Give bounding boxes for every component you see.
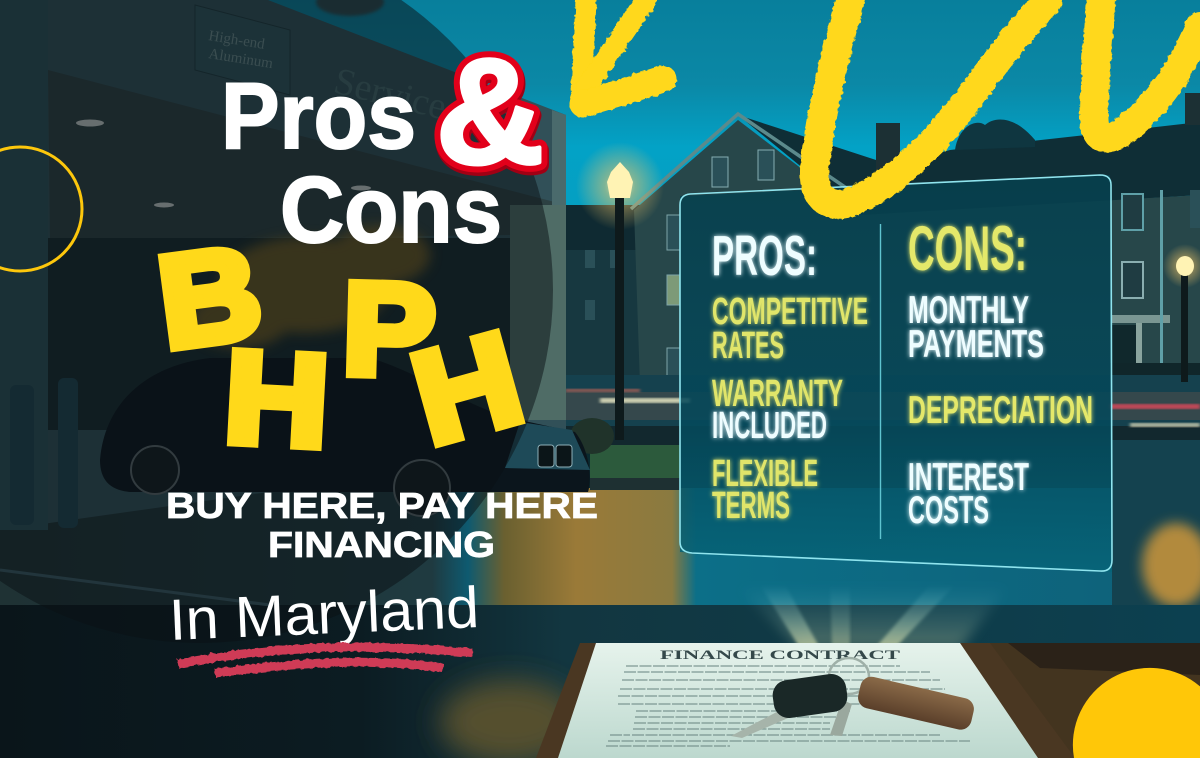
red brush underline bbox=[178, 647, 472, 673]
arrow head bbox=[581, 0, 586, 104]
con item 3: INTEREST bbox=[908, 456, 1029, 499]
contract heading: FINANCE CONTRACT bbox=[660, 647, 901, 662]
large dark circle overlay bbox=[0, 0, 553, 643]
con item 3: COSTS bbox=[908, 489, 989, 532]
panel divider bbox=[880, 224, 882, 539]
background stone buildings bbox=[566, 93, 1200, 385]
letter H: H bbox=[222, 323, 332, 474]
key blades bbox=[731, 705, 802, 738]
street lamp right bbox=[1163, 244, 1200, 382]
title: Pros: Pros bbox=[221, 63, 416, 168]
street lamp left bbox=[576, 142, 664, 440]
leather keychain bbox=[856, 675, 976, 732]
dealership building bbox=[0, 0, 566, 530]
yellow ring outline bbox=[0, 147, 82, 271]
con item 1 bbox=[908, 289, 1044, 366]
letter H: H bbox=[398, 304, 536, 472]
pro item 1 bbox=[712, 291, 868, 367]
pro item 1: COMPETITIVE bbox=[712, 291, 868, 333]
cons column bbox=[908, 214, 1093, 532]
con item 3 bbox=[908, 456, 1029, 532]
finance contract document bbox=[558, 643, 1038, 758]
sky background bbox=[0, 0, 1200, 420]
title: Cons: Cons bbox=[280, 157, 502, 262]
yellow scribble arrow bbox=[581, 0, 1200, 204]
cons heading: CONS: bbox=[908, 214, 1027, 284]
contract body lines bbox=[606, 666, 970, 746]
title: ampersand: & bbox=[436, 27, 544, 195]
subtitle line one: BUY HERE, PAY HERE bbox=[166, 485, 598, 526]
pros column bbox=[712, 224, 868, 527]
pavement stripe bbox=[0, 570, 270, 605]
service sign: Service bbox=[330, 60, 451, 128]
pro item 2 bbox=[712, 373, 843, 447]
yellow corner circle bbox=[1073, 668, 1200, 758]
tree branches above roof bbox=[316, 0, 384, 16]
sign text: High-end bbox=[207, 28, 266, 53]
leather folder bbox=[536, 643, 1200, 758]
autumn tree reflection bbox=[190, 225, 430, 348]
grass verge and curb bbox=[570, 418, 680, 490]
subtitle line two: FINANCING bbox=[268, 524, 495, 565]
pros heading: PROS: bbox=[712, 224, 817, 288]
title: ampersand: & bbox=[437, 30, 545, 198]
car keys bbox=[731, 658, 976, 738]
con item 2: DEPRECIATION bbox=[908, 389, 1093, 432]
hologram light rays bbox=[735, 585, 1010, 648]
pro item 2: INCLUDED bbox=[712, 405, 827, 447]
scribble loop two bbox=[1094, 0, 1200, 138]
key ring bbox=[829, 658, 869, 694]
pro item 3 bbox=[712, 453, 818, 527]
con item 1: PAYMENTS bbox=[908, 323, 1044, 366]
key fob bbox=[771, 672, 849, 720]
road with light streaks bbox=[560, 375, 1200, 446]
wet ground with reflections bbox=[0, 440, 1200, 607]
con item 1: MONTHLY bbox=[908, 289, 1029, 332]
pro item 3: TERMS bbox=[712, 485, 790, 527]
title: ampersand: & bbox=[436, 27, 544, 195]
BHPH rotated letters bbox=[151, 218, 536, 474]
pro item 3: FLEXIBLE bbox=[712, 453, 818, 495]
ceiling lights bbox=[76, 120, 371, 208]
sign text line 2: Aluminum bbox=[207, 46, 274, 72]
pro item 2: WARRANTY bbox=[712, 373, 843, 415]
letter P: P bbox=[341, 255, 437, 403]
scribble loop one bbox=[814, 0, 1048, 204]
letter B: B bbox=[151, 218, 269, 376]
In Maryland: In Maryland bbox=[168, 575, 480, 653]
parked car bbox=[10, 358, 590, 528]
table surface bbox=[0, 605, 1200, 758]
pro item 1: RATES bbox=[712, 325, 784, 367]
hologram panel bbox=[680, 175, 1112, 572]
